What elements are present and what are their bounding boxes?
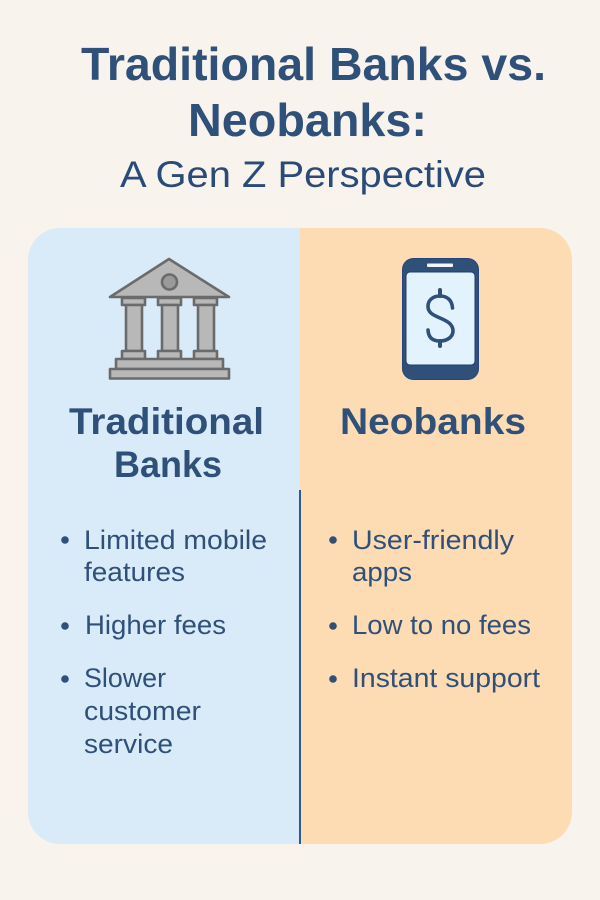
title: Neobanks: bbox=[188, 94, 427, 146]
list: traditional banks drawbacks: Slower bbox=[84, 663, 166, 693]
list: neobanks benefits bbox=[329, 525, 541, 693]
list: traditional banks drawbacks: Limited mobile bbox=[84, 525, 267, 555]
list: neobanks benefits: Instant support bbox=[352, 663, 541, 693]
list: traditional banks drawbacks: customer bbox=[84, 696, 201, 726]
list: neobanks benefits: apps bbox=[352, 557, 412, 587]
panel: neobanks bbox=[300, 228, 572, 844]
icon: bank building bbox=[110, 259, 229, 378]
list: neobanks benefits: User-friendly bbox=[352, 525, 515, 555]
heading: traditional banks bbox=[69, 401, 264, 485]
panel: traditional banks bbox=[28, 228, 300, 844]
list: traditional banks drawbacks bbox=[61, 525, 267, 759]
subtitle: A Gen Z Perspective bbox=[120, 154, 486, 195]
title bbox=[81, 38, 546, 146]
heading: traditional banks: Banks bbox=[114, 444, 222, 485]
heading: traditional banks: Traditional bbox=[69, 401, 264, 442]
list: traditional banks drawbacks: Higher fees bbox=[85, 610, 226, 640]
heading: neobanks: Neobanks bbox=[340, 401, 526, 442]
list: traditional banks drawbacks: features bbox=[84, 557, 185, 587]
list: neobanks benefits: Low to no fees bbox=[352, 610, 531, 640]
icon: smartphone with dollar sign bbox=[402, 258, 478, 380]
title: Traditional Banks vs. bbox=[81, 38, 546, 90]
list: traditional banks drawbacks: service bbox=[84, 729, 173, 759]
